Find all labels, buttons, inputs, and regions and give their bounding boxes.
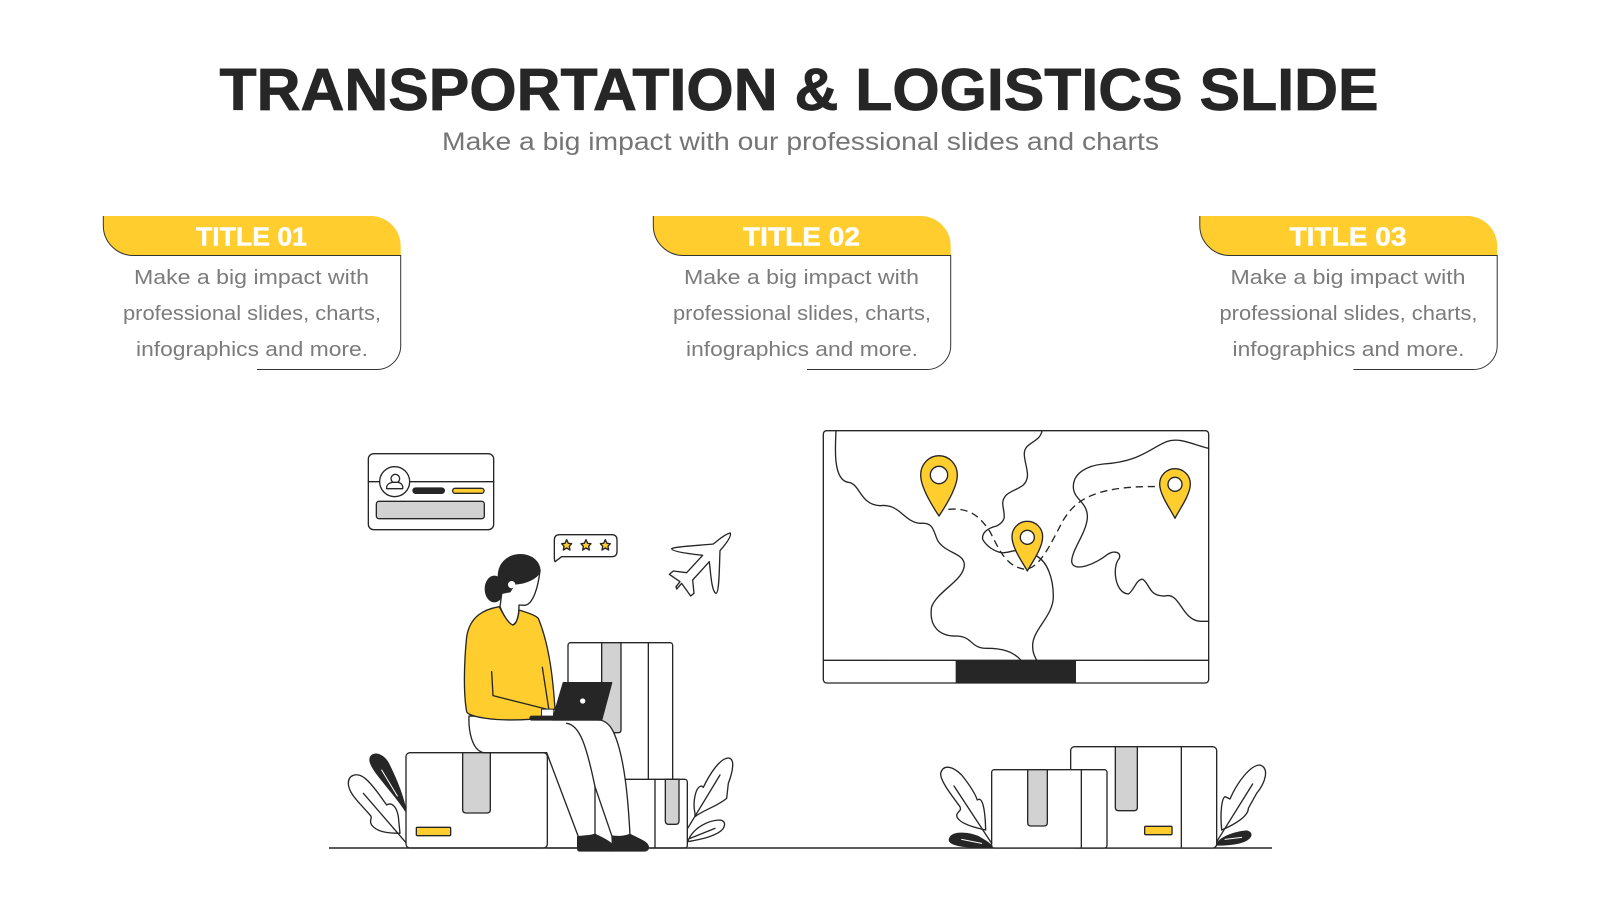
- illustration: person on boxes: [348, 454, 733, 851]
- body text: Make a big impact with: [1230, 267, 1466, 289]
- heading: TITLE 01: [196, 222, 307, 252]
- neck and face: [500, 563, 540, 625]
- right plant: [1216, 765, 1266, 845]
- coastlines: [835, 431, 1209, 660]
- body text: infographics and more.: [686, 339, 918, 361]
- hand: [542, 709, 553, 717]
- back box: [1071, 747, 1217, 848]
- front box: [992, 770, 1107, 848]
- icon: airplane: [669, 533, 731, 596]
- left plant: [941, 767, 992, 847]
- header tab: [1200, 216, 1497, 256]
- laptop: [530, 683, 612, 720]
- icon: profile card: [368, 454, 494, 530]
- panel: title 02: [653, 216, 951, 370]
- hair: [498, 555, 540, 593]
- legs: [469, 716, 630, 838]
- body text: Make a big impact with: [684, 267, 919, 289]
- pin 2: [1012, 521, 1043, 571]
- hair bun: [485, 576, 503, 602]
- panel: title 01: [103, 216, 401, 370]
- heading: TITLE 02: [743, 222, 860, 252]
- front left box: [406, 753, 547, 848]
- boxes and plants, right: [941, 747, 1266, 848]
- body text: professional slides, charts,: [123, 303, 381, 325]
- body text: professional slides, charts,: [673, 303, 931, 325]
- front right box: [547, 779, 687, 848]
- body text: [673, 267, 931, 361]
- shoes: [578, 834, 613, 851]
- plant right: [688, 758, 733, 842]
- plant left: [348, 754, 406, 843]
- map screen: [823, 431, 1209, 683]
- base bar: [823, 660, 1209, 683]
- body text: infographics and more.: [136, 339, 368, 361]
- ground line: [329, 847, 1272, 849]
- header tab: [103, 216, 401, 256]
- heading: TITLE 03: [1290, 222, 1406, 252]
- person: [464, 555, 648, 851]
- icon: rating speech bubble: [554, 535, 617, 562]
- pin 3: [1160, 469, 1190, 518]
- panel: title 03: [1200, 216, 1497, 370]
- sweater: [464, 607, 555, 720]
- body text: [123, 267, 381, 361]
- rear box stack: [568, 643, 673, 786]
- body text: Make a big impact with: [134, 267, 369, 289]
- body text: professional slides, charts,: [1220, 303, 1478, 325]
- body text: [1220, 267, 1478, 361]
- title: TRANSPORTATION & LOGISTICS SLIDE: [220, 57, 1378, 123]
- subtitle: Make a big impact with our professional slides and charts: [442, 128, 1159, 156]
- dashed route: [948, 487, 1160, 569]
- body text: infographics and more.: [1232, 339, 1464, 361]
- header tab: [653, 216, 951, 256]
- screen frame: [823, 431, 1209, 683]
- pin 1: [921, 456, 957, 516]
